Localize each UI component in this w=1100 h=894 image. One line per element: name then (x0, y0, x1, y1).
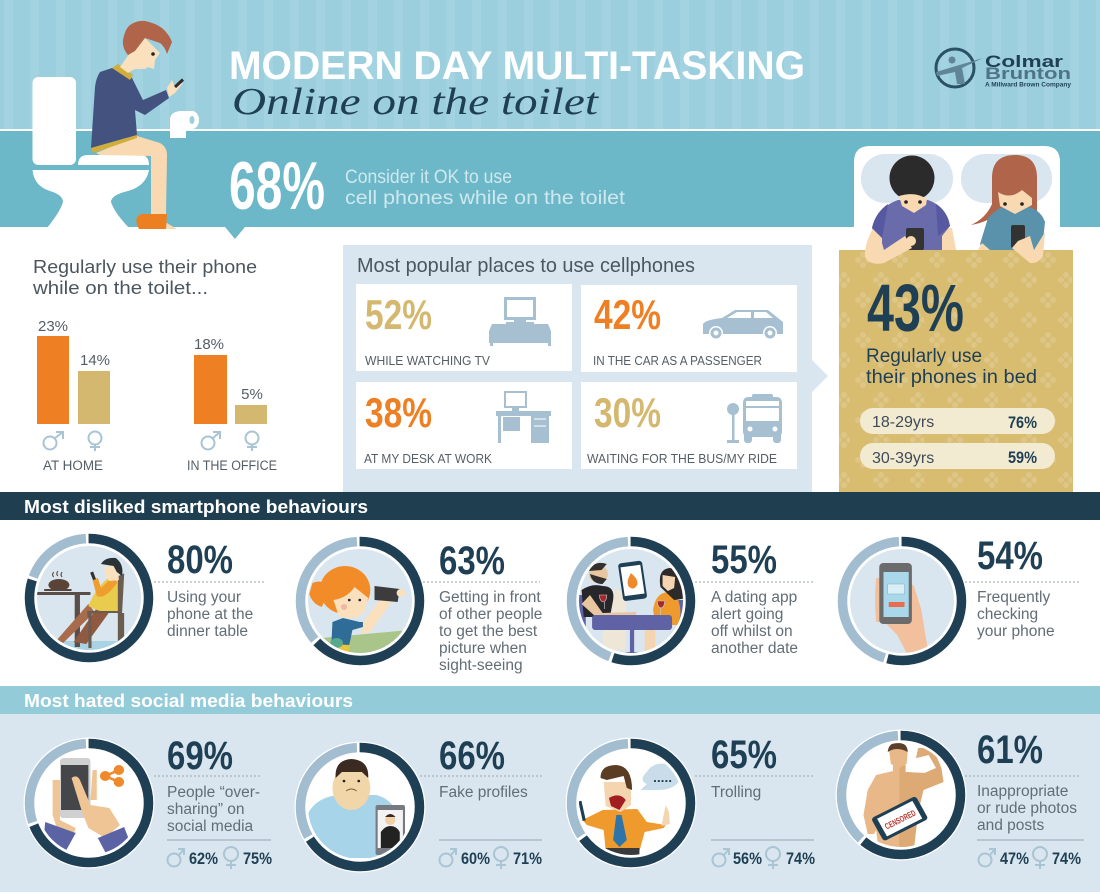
bed headboard (854, 146, 1060, 250)
pill: 30-39yrs: 30-39yrs (872, 450, 934, 467)
logo: Colmar Brunton: Colmar (985, 52, 1064, 71)
card: TV: WHILE WATCHING TV (365, 354, 491, 368)
card: bus: WAITING FOR THE BUS/MY RIDE (587, 452, 777, 466)
toilet paper (170, 111, 199, 138)
card: car: IN THE CAR AS A PASSENGER (593, 354, 762, 368)
gender split: 62% (189, 849, 218, 868)
description: Trolling (711, 784, 761, 801)
gender split: 71% (513, 849, 542, 868)
illustration: girl taking selfie (309, 566, 405, 653)
percentage: 65% (711, 733, 777, 777)
description: picture when (439, 640, 527, 657)
illustration: woman in bed (971, 155, 1045, 263)
card: TV (356, 284, 572, 371)
section band: hated social media behaviours (0, 686, 1100, 714)
chart heading (32, 256, 257, 298)
statistic: 43%: 43% (867, 271, 964, 346)
illustration: man with fake profile (307, 759, 405, 858)
percentage: 69% (167, 734, 233, 778)
description: to get the best (439, 623, 538, 640)
percentage: 80% (167, 538, 233, 582)
pill: 30-39yrs: 59% (1008, 448, 1037, 467)
illustration: dating couple (579, 560, 683, 653)
percentage: 55% (711, 538, 777, 582)
pill: 18-29yrs (860, 408, 1055, 434)
section background (0, 714, 1100, 892)
icon: TV (489, 297, 551, 346)
card: TV: 52% (365, 291, 432, 338)
icon: desk (496, 391, 551, 443)
description (977, 589, 1055, 640)
illustration: angry troll (578, 764, 680, 858)
description: phone at the (167, 606, 253, 623)
gender split (440, 847, 542, 869)
panel heading: Most popular places to use cellphones (357, 255, 695, 277)
illustration: censored man (863, 743, 943, 848)
logo: Colmar Brunton: Brunton (985, 64, 1071, 83)
section band: hated social media behaviours: Most hated social media behaviours (24, 691, 353, 711)
panel: most popular places (343, 245, 828, 492)
bars (37, 336, 267, 424)
bar values: 5% (241, 386, 263, 403)
card: desk: 38% (365, 389, 432, 436)
percentage: 61% (977, 728, 1043, 772)
collar and hem (91, 64, 137, 153)
description: your phone (977, 623, 1055, 640)
bar captions: IN THE OFFICE (187, 458, 277, 473)
description: Fake profiles (439, 784, 528, 801)
percentage: 63% (439, 539, 505, 583)
gender split: 56% (733, 849, 762, 868)
panel: bar chart phone use on the toilet (32, 256, 277, 473)
subtitle: Online on the toilet (232, 81, 600, 123)
bar values: 23% (38, 318, 68, 335)
description: checking (977, 606, 1038, 623)
percentage: 54% (977, 534, 1043, 578)
illustration: hands with phone (43, 758, 132, 856)
gender split (712, 847, 815, 869)
illustration: hand holding phone (875, 563, 929, 655)
donut: 61% (836, 730, 966, 860)
chart heading: Regularly use their phone (33, 256, 257, 277)
icon: car (703, 310, 783, 340)
title: MODERN DAY MULTI-TASKING (229, 44, 805, 88)
gender split (978, 847, 1081, 869)
description: Using your (167, 589, 241, 606)
description: off whilst on (711, 623, 793, 640)
description: Getting in front (439, 589, 541, 606)
text: regularly use in bed: their phones in bed (866, 367, 1037, 388)
card: desk (356, 382, 572, 469)
gender split: 75% (243, 849, 272, 868)
percentage: 66% (439, 734, 505, 778)
item: 66% fake profiles (294, 734, 542, 872)
illustration: angry troll: ..... (653, 770, 672, 785)
description: Frequently (977, 589, 1050, 606)
pill: 18-29yrs: 76% (1008, 413, 1037, 432)
pill: 30-39yrs (860, 443, 1055, 469)
statistic: 68%: Consider it OK to use (345, 166, 512, 188)
statistic: 68% (229, 148, 626, 224)
text: regularly use in bed (866, 346, 1037, 388)
bar values: 14% (80, 352, 110, 369)
donut: 65% (566, 738, 696, 868)
gold panel (839, 250, 1073, 492)
donut: 66% (294, 742, 426, 872)
hand and phone (167, 80, 183, 97)
teal band (0, 131, 1100, 239)
panel: bed and 43% statistic (839, 146, 1073, 492)
statistic: 68%: cell phones while on the toilet (345, 187, 626, 209)
logo: Colmar Brunton (936, 49, 1071, 88)
gender icons (44, 432, 258, 451)
description: A dating app (711, 589, 797, 606)
illustration: phone at dinner (37, 558, 124, 650)
card: bus (581, 382, 797, 469)
bar values (38, 318, 263, 403)
item: 69% over-sharing (24, 734, 272, 869)
logo: Colmar Brunton: A Millward Brown Company (985, 82, 1071, 88)
item: 55% dating app (572, 538, 815, 660)
trousers at ankles (136, 214, 167, 229)
donut: 63% (300, 542, 420, 660)
card: bus: 30% (594, 389, 661, 436)
text: regularly use in bed: Regularly use (866, 346, 982, 367)
description: of other people (439, 606, 542, 623)
description: or rude photos (977, 800, 1077, 817)
donut: 55% (572, 542, 690, 660)
description (711, 589, 798, 657)
section band: disliked behaviours (0, 492, 1100, 520)
donut: 69% (24, 738, 154, 868)
description: Inappropriate (977, 783, 1068, 800)
card: car: 42% (594, 291, 661, 338)
description (167, 589, 253, 640)
item: 65% trolling (566, 733, 815, 869)
hair (123, 21, 172, 55)
item: 61% inappropriate photos (836, 728, 1084, 869)
description (167, 784, 260, 835)
illustration: man in bed (865, 156, 956, 264)
section band: disliked behaviours: Most disliked smartphone behaviours (24, 497, 368, 517)
description (977, 783, 1077, 834)
chart heading: while on the toilet... (32, 277, 208, 298)
bar captions (43, 458, 277, 473)
donut: 54% (842, 542, 962, 660)
card: car (581, 285, 797, 372)
description: dinner table (167, 623, 248, 640)
description: sharing” on (167, 801, 245, 818)
gender split (168, 847, 272, 869)
card: desk: AT MY DESK AT WORK (364, 452, 493, 466)
illustration: censored man: CENSORED (883, 808, 917, 831)
bar values: 18% (194, 336, 224, 353)
gender split: 74% (786, 849, 815, 868)
description: social media (167, 818, 254, 835)
description: People “over- (167, 784, 260, 801)
illustration: man on toilet (32, 21, 199, 229)
item: 54% checking phone (842, 534, 1081, 660)
description: alert going (711, 606, 783, 623)
icon: bus (727, 394, 782, 443)
item: 80% dinner table (30, 538, 266, 658)
leg and foot (96, 136, 177, 229)
gender split: 60% (461, 849, 490, 868)
head (120, 38, 160, 73)
description: sight-seeing (439, 657, 523, 674)
gender split: 74% (1052, 849, 1081, 868)
statistic: 68%: 68% (229, 148, 325, 224)
donut: 80% (30, 538, 148, 658)
bar captions: AT HOME (43, 458, 103, 473)
item: 63% sight-seeing (300, 539, 542, 674)
description: and posts (977, 817, 1044, 834)
toilet (32, 77, 149, 228)
description (439, 589, 542, 674)
sweater (91, 68, 169, 148)
gender split: 47% (1000, 849, 1029, 868)
header striped background (0, 0, 1100, 129)
pill: 18-29yrs: 18-29yrs (872, 414, 934, 431)
description: another date (711, 640, 798, 657)
